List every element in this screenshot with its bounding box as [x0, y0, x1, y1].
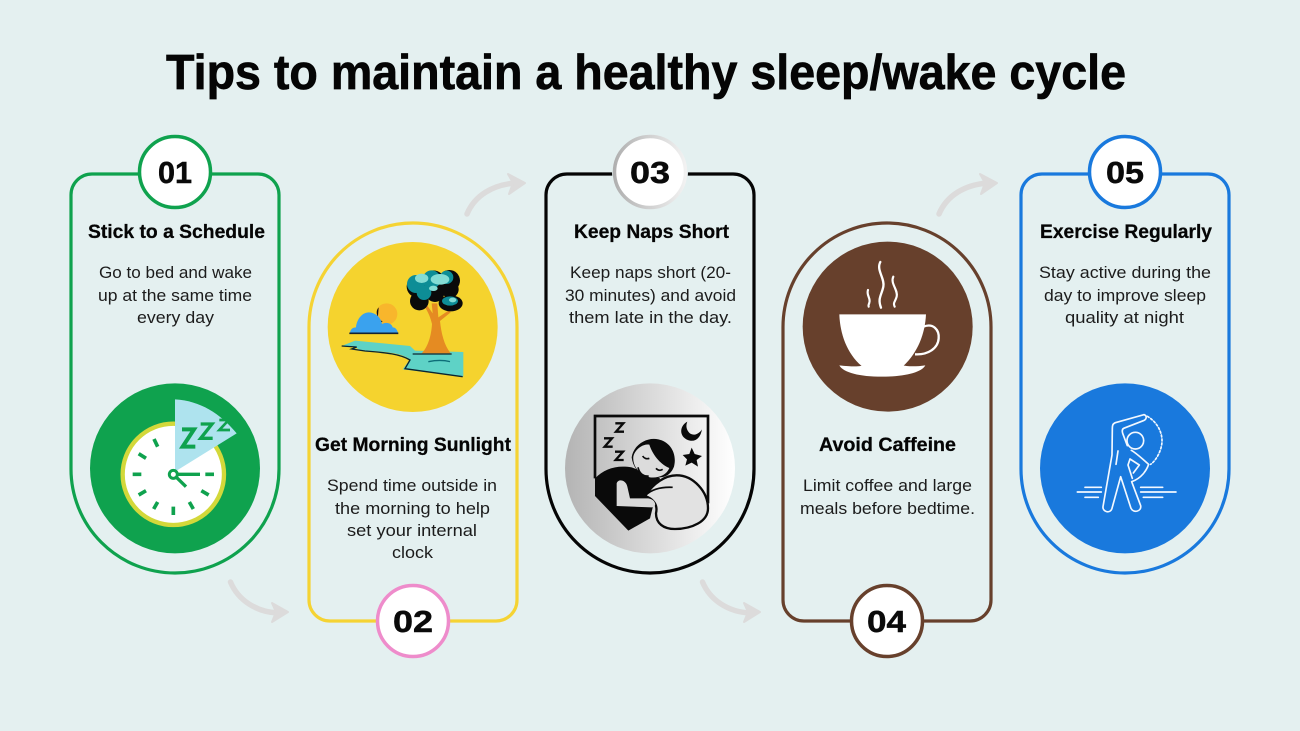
icon: person sleeping on pillow	[565, 383, 735, 553]
arrow: step 2 to 3	[467, 174, 525, 214]
panel: step 4 avoid caffeine	[783, 223, 991, 656]
panel: step 5 exercise regularly	[1021, 136, 1229, 573]
body text 4: meals before bedtime.	[800, 500, 975, 518]
panel: step 3 keep naps short	[546, 134, 754, 573]
number badge 05	[1090, 136, 1160, 208]
heading 2: Get Morning Sunlight	[315, 435, 512, 456]
heading 3: Keep Naps Short	[574, 222, 730, 243]
number badge 05: 05	[1106, 155, 1144, 190]
arrow: step 3 to 4	[702, 582, 760, 622]
arrow: step 4 to 5	[939, 174, 997, 214]
icon: steaming coffee cup	[803, 242, 973, 412]
body text 2: clock	[392, 544, 434, 562]
number badge 03	[612, 134, 688, 210]
body text 2: Spend time outside in	[327, 477, 497, 495]
body text 1: up at the same time	[98, 287, 252, 305]
number badge 01: 01	[158, 155, 192, 190]
number badge 02: 02	[393, 604, 433, 639]
heading 5: Exercise Regularly	[1040, 222, 1212, 243]
panel outline 3	[546, 174, 754, 573]
body text 5: quality at night	[1065, 309, 1184, 327]
number badge 01	[140, 136, 210, 208]
panel: step 1 stick to a schedule	[71, 136, 279, 573]
icon: clock with zzz	[90, 383, 260, 553]
body text 3: them late in the day.	[569, 309, 732, 327]
panel outline 4	[783, 223, 991, 621]
body text 1: Go to bed and wake	[99, 264, 252, 282]
body text 3: Keep naps short (20-	[570, 264, 731, 282]
title: Tips to maintain a healthy sleep/wake cycle	[166, 46, 1126, 100]
panel outline 2	[309, 223, 517, 621]
body text 2: the morning to help	[335, 500, 490, 518]
body text 4: Limit coffee and large	[803, 477, 972, 495]
number badge 02	[378, 586, 448, 656]
body text 4	[800, 477, 975, 518]
heading 1: Stick to a Schedule	[88, 222, 265, 243]
body text 2	[327, 477, 497, 562]
body text 3	[565, 264, 736, 327]
panel outline 5	[1021, 174, 1229, 573]
body text 1	[98, 264, 252, 327]
arrow: step 1 to 2	[230, 582, 288, 622]
body text 3: 30 minutes) and avoid	[565, 287, 736, 305]
number badge 04: 04	[867, 604, 907, 639]
body text 5	[1039, 264, 1211, 327]
number badge 04	[852, 586, 922, 656]
body text 5: day to improve sleep	[1044, 287, 1206, 305]
icon: person stretching	[1040, 383, 1210, 553]
heading 4: Avoid Caffeine	[819, 435, 956, 456]
body text 2: set your internal	[347, 522, 477, 540]
body text 1: every day	[137, 309, 215, 327]
panel: step 2 get morning sunlight	[309, 223, 517, 656]
icon: tree and sun landscape	[328, 242, 498, 412]
panel outline 1	[71, 174, 279, 573]
number badge 03: 03	[630, 155, 670, 190]
body text 5: Stay active during the	[1039, 264, 1211, 282]
